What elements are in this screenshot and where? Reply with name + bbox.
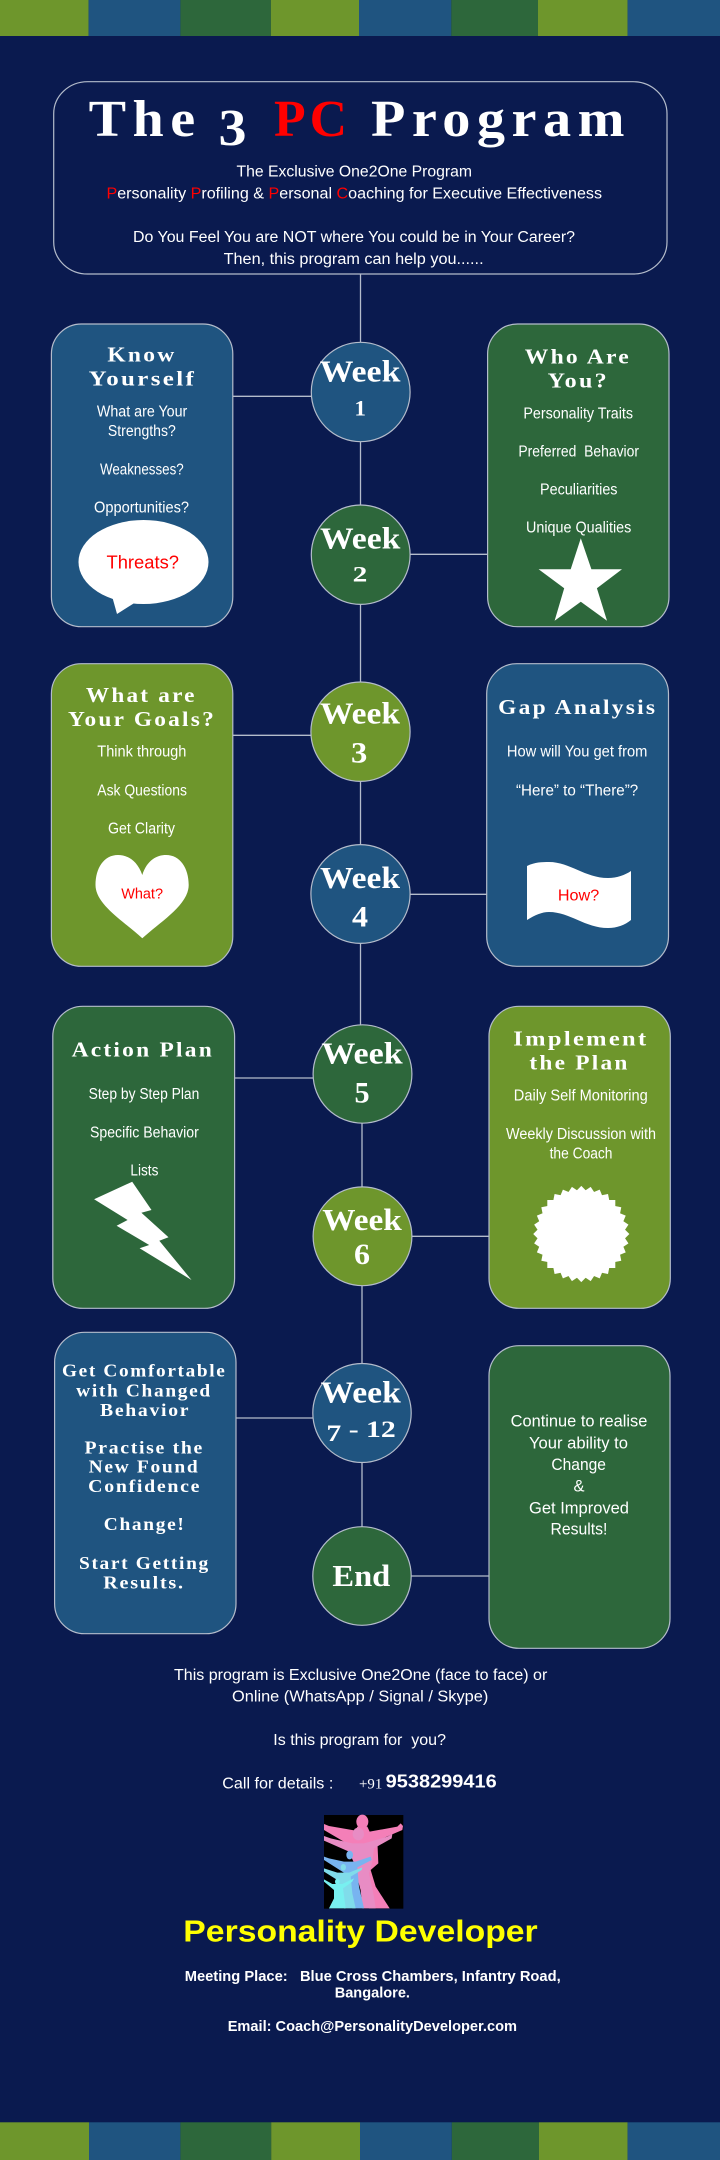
week 5 node: Week bbox=[321, 1035, 404, 1070]
icon: seal burst bbox=[533, 1186, 629, 1282]
list: action plan items: Step by Step Plan bbox=[89, 1086, 199, 1103]
heading: goals: Your Goals? bbox=[68, 707, 216, 731]
week 7-12 node: - 12 bbox=[341, 1417, 396, 1442]
heading: who are you: You? bbox=[548, 368, 609, 392]
subtitle text: The Exclusive One2One Program bbox=[236, 164, 472, 181]
title: The bbox=[89, 91, 202, 148]
text: meeting place and email: Email: Coach@PersonalityDeveloper.com bbox=[228, 2018, 517, 2035]
timeline connector lines bbox=[233, 274, 489, 1576]
text: get comfortable lines: Results. bbox=[103, 1572, 185, 1592]
title: 3 bbox=[218, 100, 246, 157]
panel: gap analysis bbox=[487, 664, 668, 966]
list: who are you items: Unique Qualities bbox=[526, 520, 632, 537]
week 4 node bbox=[311, 845, 410, 943]
list: know yourself questions: Strengths? bbox=[108, 423, 176, 440]
icon: star bbox=[539, 538, 622, 621]
heading: gap analysis: Gap Analysis bbox=[498, 695, 657, 719]
text: continue lines: Results! bbox=[550, 1520, 607, 1538]
list: action plan items: Specific Behavior bbox=[90, 1124, 199, 1141]
brand name: Personality Developer bbox=[183, 1914, 538, 1949]
week 1 node bbox=[311, 342, 410, 442]
text: program format and call to action: 9538299416 bbox=[386, 1772, 497, 1792]
title bbox=[89, 91, 631, 157]
list: know yourself questions bbox=[94, 404, 189, 516]
list: who are you items bbox=[518, 405, 639, 537]
text: continue lines: Change bbox=[551, 1456, 606, 1474]
icon: heart bbox=[96, 855, 189, 938]
week 7-12 node bbox=[313, 1364, 411, 1462]
list: action plan items bbox=[89, 1086, 199, 1180]
week 2 node: Week bbox=[320, 520, 401, 555]
list: implement items bbox=[506, 1088, 656, 1162]
text: get comfortable lines: Practise the bbox=[84, 1437, 204, 1457]
week 2 node: 2 bbox=[353, 562, 367, 587]
text: program format and call to action: Online (WhatsApp / Signal / Skype) bbox=[232, 1689, 488, 1706]
panel: know yourself bbox=[51, 324, 233, 627]
text: continue lines: Continue to realise bbox=[511, 1413, 647, 1431]
end node: End bbox=[332, 1558, 390, 1593]
panel: continue to realise bbox=[489, 1346, 670, 1648]
panel: title header bbox=[54, 82, 667, 274]
subtitle text bbox=[106, 164, 602, 268]
text: continue lines: Get Improved bbox=[529, 1499, 629, 1517]
text: gap analysis question: “Here” to “There”? bbox=[516, 782, 639, 799]
panel: implement the plan bbox=[489, 1006, 670, 1308]
week 5 node bbox=[313, 1025, 412, 1123]
icon: heart: What? bbox=[121, 885, 163, 902]
text: gap analysis question bbox=[507, 744, 647, 799]
list: know yourself questions: Weaknesses? bbox=[100, 461, 184, 478]
icon: speech bubble threats: Threats? bbox=[106, 551, 179, 572]
list: who are you items: Preferred Behavior bbox=[518, 444, 639, 461]
subtitle text: Do You Feel You are NOT where You could be in Your Career? bbox=[133, 229, 575, 246]
week 1 node: 1 bbox=[354, 396, 366, 421]
text: program format and call to action: Call for details : bbox=[222, 1775, 333, 1792]
end node bbox=[313, 1527, 411, 1625]
week 3 node: 3 bbox=[351, 737, 367, 770]
panel: action plan bbox=[53, 1006, 235, 1308]
text: meeting place and email: Bangalore. bbox=[335, 1984, 410, 2001]
week 4 node: 4 bbox=[352, 901, 368, 934]
list: goals items: Get Clarity bbox=[108, 820, 175, 837]
text: get comfortable lines: Behavior bbox=[100, 1400, 190, 1420]
text: program format and call to action: Is this program for you? bbox=[273, 1732, 446, 1749]
text: continue lines: Your ability to bbox=[529, 1434, 628, 1452]
week 6 node bbox=[313, 1187, 412, 1286]
list: implement items: Daily Self Monitoring bbox=[514, 1088, 648, 1105]
week 5 node: 5 bbox=[354, 1077, 370, 1110]
week 3 node bbox=[311, 682, 410, 781]
text: get comfortable lines: Get Comfortable bbox=[62, 1361, 226, 1381]
list: implement items: Weekly Discussion with bbox=[506, 1126, 656, 1143]
icon: speech bubble threats bbox=[78, 520, 208, 614]
heading: know yourself: Know bbox=[107, 343, 176, 367]
heading: who are you: Who Are bbox=[525, 344, 631, 368]
week 6 node: Week bbox=[322, 1202, 403, 1237]
icon: lightning bolt bbox=[94, 1182, 192, 1280]
list: goals items bbox=[97, 744, 187, 837]
heading: know yourself bbox=[89, 343, 196, 391]
list: who are you items: Peculiarities bbox=[540, 482, 618, 499]
week 7-12 node: Week bbox=[320, 1375, 402, 1410]
week 6 node: 6 bbox=[354, 1238, 370, 1271]
panel: what are your goals bbox=[51, 664, 233, 966]
list: goals items: Think through bbox=[97, 744, 186, 761]
heading: goals bbox=[68, 683, 216, 731]
heading: goals: What are bbox=[86, 683, 197, 707]
icon: wave flag bbox=[527, 862, 631, 928]
week 7-12 node: 7 bbox=[326, 1421, 341, 1446]
list: implement items: the Coach bbox=[550, 1145, 612, 1162]
panel: who are you bbox=[488, 324, 669, 627]
heading: know yourself: Yourself bbox=[89, 367, 196, 391]
title: Program bbox=[371, 91, 631, 148]
week 2 node bbox=[311, 505, 410, 604]
bottom colour band bbox=[0, 2122, 720, 2160]
text: get comfortable lines: Start Getting bbox=[79, 1553, 210, 1573]
text: meeting place and email: Meeting Place: Blue Cross Chambers, Infantry Road, bbox=[185, 1968, 561, 1985]
heading: implement the plan: the Plan bbox=[529, 1050, 630, 1074]
list: know yourself questions: What are Your bbox=[97, 404, 187, 421]
heading: implement the plan: Implement bbox=[513, 1027, 648, 1051]
week 4 node: Week bbox=[320, 860, 401, 895]
list: who are you items: Personality Traits bbox=[523, 405, 633, 422]
text: get comfortable lines bbox=[62, 1361, 226, 1592]
text: get comfortable lines: Change! bbox=[104, 1514, 186, 1534]
top colour band bbox=[0, 0, 720, 36]
text: get comfortable lines: New Found bbox=[89, 1456, 199, 1476]
text: gap analysis question: How will You get from bbox=[507, 744, 647, 761]
heading: implement the plan bbox=[513, 1027, 648, 1074]
subtitle text: Then, this program can help you...... bbox=[224, 251, 484, 268]
text: get comfortable lines: with Changed bbox=[76, 1380, 212, 1400]
text: continue lines: & bbox=[574, 1478, 584, 1496]
text: meeting place and email bbox=[185, 1968, 561, 2035]
text: continue lines bbox=[511, 1413, 647, 1538]
list: know yourself questions: Opportunities? bbox=[94, 499, 189, 516]
subtitle text: Personality Profiling & Personal Coaching for Executive Effectiveness bbox=[106, 186, 602, 203]
text: program format and call to action bbox=[174, 1667, 547, 1792]
week 3 node: Week bbox=[320, 695, 401, 730]
text: program format and call to action: +91 bbox=[359, 1776, 382, 1792]
title: PC bbox=[274, 91, 351, 148]
icon: wave flag: How? bbox=[558, 888, 600, 905]
text: program format and call to action: This program is Exclusive One2One (face to face) or bbox=[174, 1667, 547, 1684]
list: goals items: Ask Questions bbox=[97, 782, 187, 799]
heading: action plan: Action Plan bbox=[72, 1038, 214, 1062]
panel: get comfortable bbox=[55, 1332, 236, 1634]
icon: personality developer logo bbox=[324, 1815, 403, 1909]
text: get comfortable lines: Confidence bbox=[88, 1476, 201, 1496]
heading: who are you bbox=[525, 344, 631, 392]
list: action plan items: Lists bbox=[130, 1163, 159, 1180]
week 1 node: Week bbox=[320, 354, 401, 389]
